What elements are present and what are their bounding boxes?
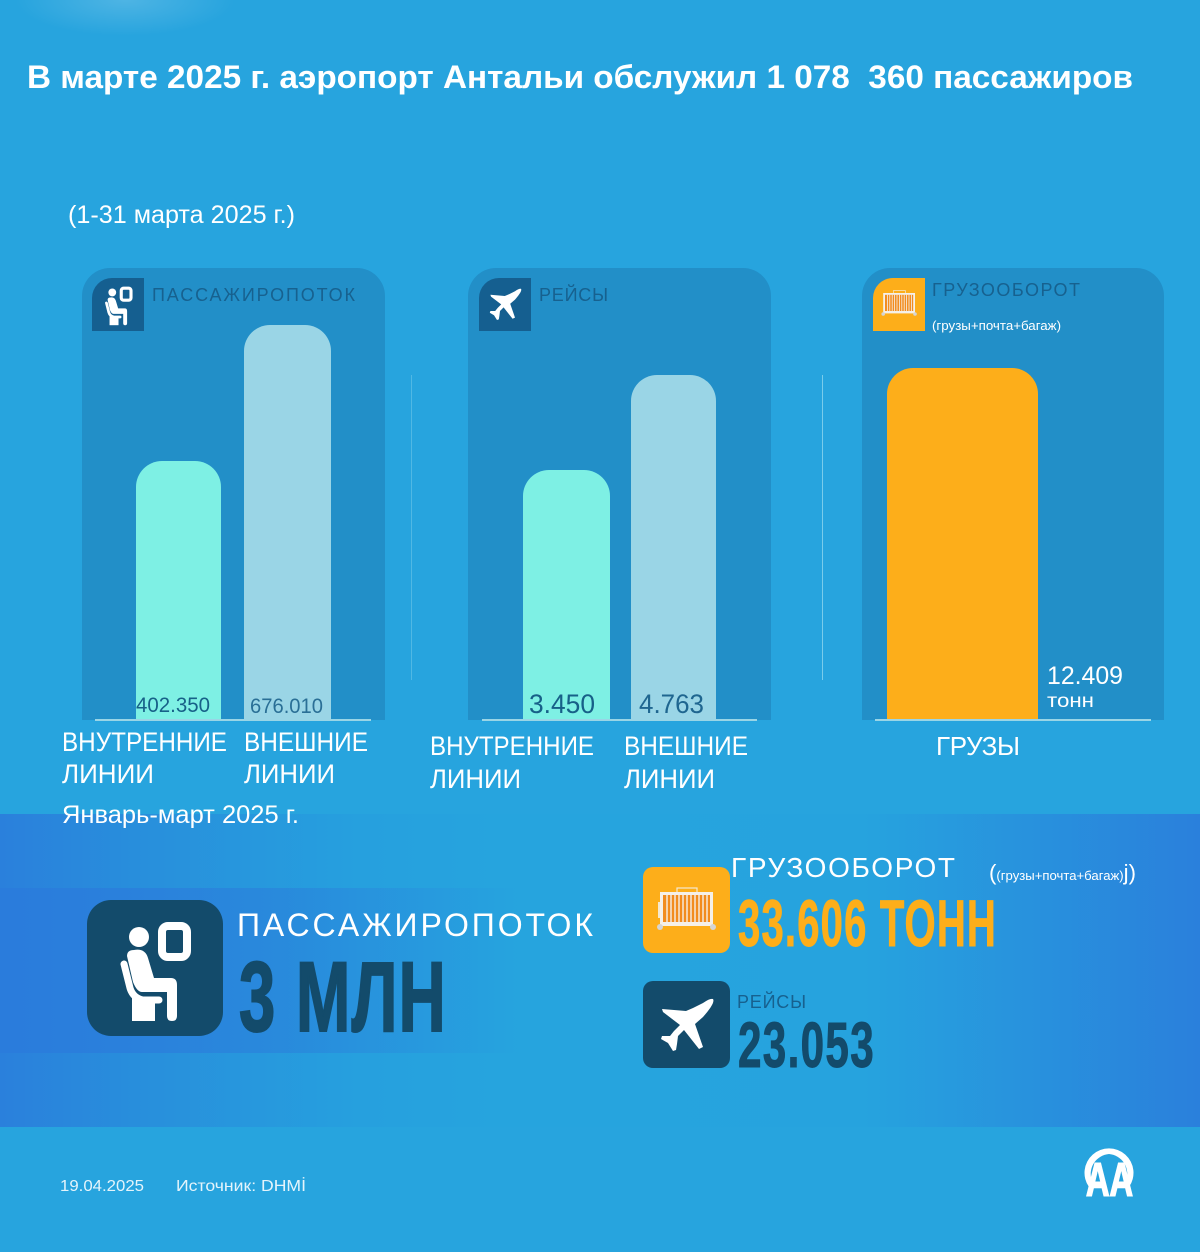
panel: passenger traffic bbox=[82, 268, 385, 721]
value: 3 МЛН bbox=[239, 941, 447, 1052]
heading: ГРУЗООБОРОТ bbox=[731, 852, 955, 883]
heading: РЕЙСЫ bbox=[737, 991, 806, 1012]
labels: flight bars: ЛИНИИ bbox=[430, 764, 521, 794]
value: 33.606 ТОНН bbox=[738, 886, 997, 960]
panel heading: ГРУЗООБОРОТ bbox=[932, 280, 1080, 300]
logo: AA: AA bbox=[1086, 1153, 1133, 1206]
panel: cargo bbox=[862, 268, 1164, 721]
note: ((грузы+почта+багаж)j) bbox=[989, 860, 1136, 885]
footer source: Источник: DHMİ bbox=[176, 1176, 306, 1195]
period label: January-March: Январь-март 2025 г. bbox=[62, 801, 299, 829]
panel heading: ПАССАЖИРОПОТОК bbox=[152, 285, 356, 305]
period label: March: (1-31 марта 2025 г.) bbox=[68, 201, 295, 229]
bar: international flights bbox=[631, 375, 716, 720]
footer date: 19.04.2025 bbox=[60, 1178, 144, 1195]
unit: tons: тонн bbox=[1047, 691, 1094, 712]
icon: passenger seat bbox=[92, 278, 144, 331]
panel: flights bbox=[468, 268, 771, 721]
icon: cargo suitcase large bbox=[643, 867, 730, 953]
labels: passenger bars: ВНУТРЕННИЕ bbox=[62, 727, 227, 757]
value: domestic passengers: 402.350 bbox=[136, 694, 210, 717]
labels: flight bars: ВНЕШНИЕ bbox=[624, 731, 748, 761]
labels: passenger bars: ЛИНИИ bbox=[62, 759, 154, 789]
logo: AA bbox=[1084, 1148, 1134, 1206]
labels: passenger bars: ЛИНИИ bbox=[244, 759, 335, 789]
summary: flights bbox=[643, 981, 875, 1081]
value: 23.053 bbox=[738, 1009, 875, 1081]
bar: domestic flights bbox=[523, 470, 610, 720]
summary band bbox=[0, 814, 1200, 1127]
labels: flight bars: ВНУТРЕННИЕ bbox=[430, 731, 594, 761]
value: cargo: 12.409 bbox=[1047, 662, 1123, 690]
panel heading: РЕЙСЫ bbox=[539, 284, 608, 305]
bar: domestic passengers bbox=[136, 461, 221, 720]
labels: flight bars: ЛИНИИ bbox=[624, 764, 715, 794]
value: international flights: 4.763 bbox=[639, 689, 704, 719]
icon: cargo suitcase bbox=[873, 278, 925, 331]
title: В марте 2025 г. аэропорт Антальи обслужил 1 078 360 пассажиров bbox=[27, 59, 1133, 95]
bar: cargo bbox=[887, 368, 1038, 720]
bar: international passengers bbox=[244, 325, 331, 720]
value: international passengers: 676.010 bbox=[250, 695, 323, 718]
summary: passengers bbox=[87, 900, 593, 1052]
summary: cargo bbox=[643, 852, 1136, 960]
labels: passenger bars: ВНЕШНИЕ bbox=[244, 727, 368, 757]
icon: plane large bbox=[643, 981, 730, 1068]
label: cargo bar: ГРУЗЫ bbox=[936, 731, 1020, 761]
panel subheading: (грузы+почта+багаж) bbox=[932, 318, 1061, 333]
value: domestic flights: 3.450 bbox=[529, 689, 595, 719]
labels: passenger bars bbox=[62, 727, 368, 789]
icon: passenger seat large bbox=[87, 900, 223, 1036]
heading: ПАССАЖИРОПОТОК bbox=[237, 907, 593, 943]
icon: plane bbox=[479, 278, 531, 331]
labels: flight bars bbox=[430, 731, 748, 794]
